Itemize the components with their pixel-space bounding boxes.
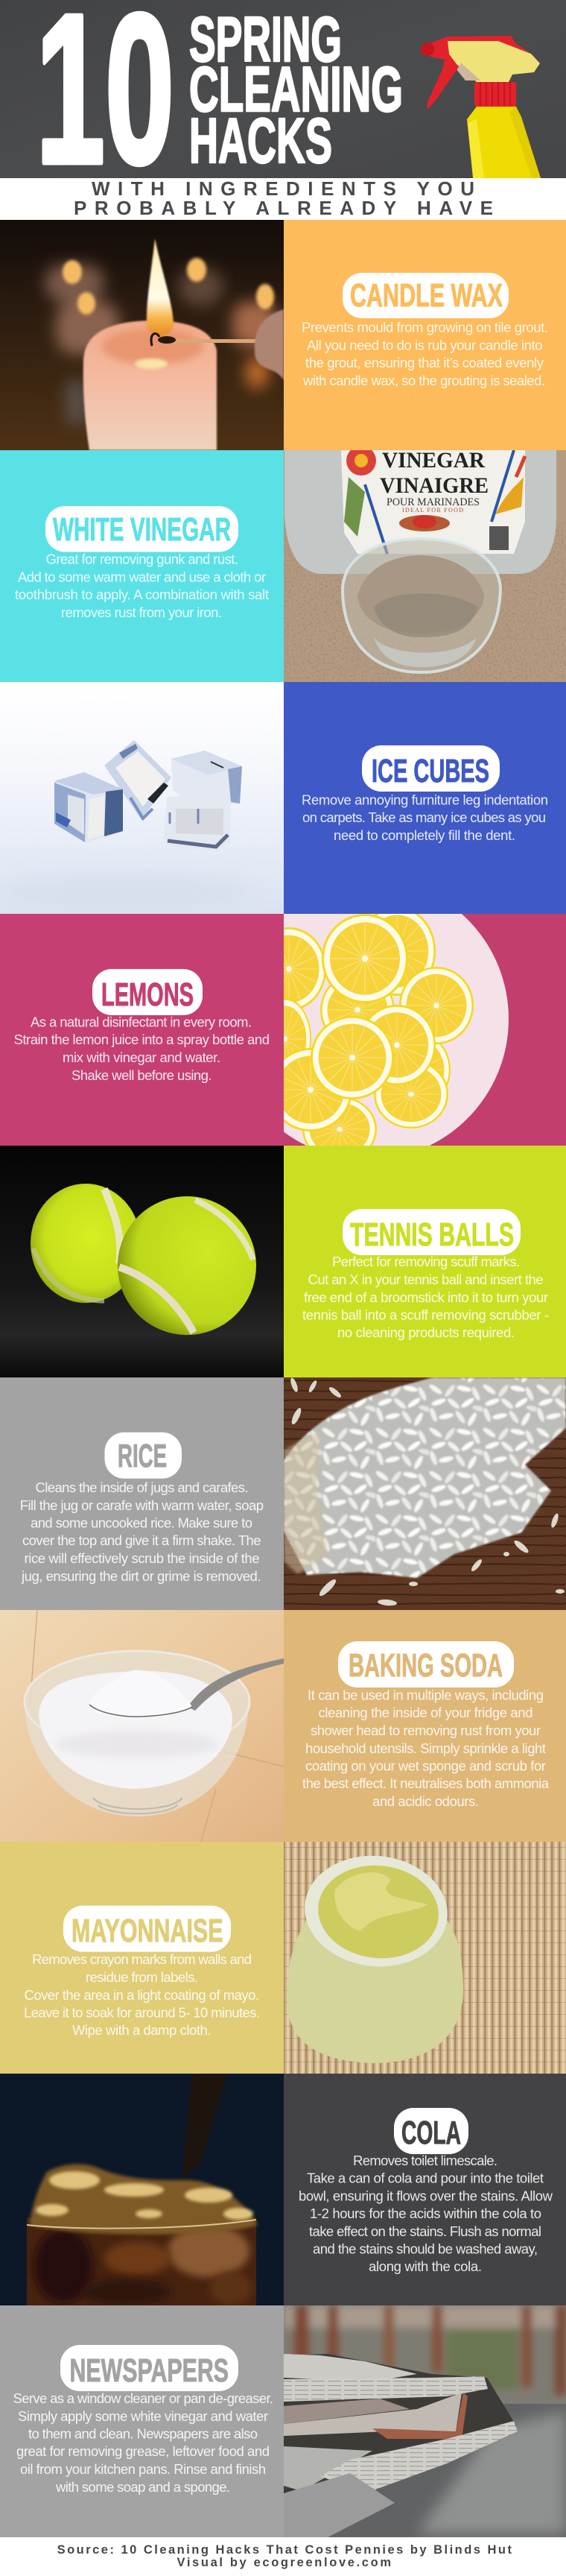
panel: mayonnaise bbox=[0, 1842, 284, 2074]
text: lemons description: mix with vinegar and water. bbox=[63, 1049, 220, 1065]
photo: mayonnaise jar on bamboo mat bbox=[284, 1842, 566, 2074]
text: white vinegar description: Great for removing gunk and rust. bbox=[46, 552, 238, 567]
jug label bbox=[341, 446, 525, 554]
text: rice description: rice will effectively scrub the inside of the bbox=[24, 1550, 259, 1566]
text: candle wax description: All you need to do is rub your candle into bbox=[307, 337, 542, 353]
panel: white vinegar bbox=[0, 450, 284, 682]
text: ice cubes description: Remove annoying furniture leg indentation bbox=[302, 792, 548, 807]
text: rice description: jug, ensuring the dirt or grime is removed. bbox=[21, 1568, 261, 1584]
text: candle wax description: with candle wax, so the grouting is sealed. bbox=[302, 373, 545, 388]
text: newspapers description: with some soap and a sponge. bbox=[55, 2479, 230, 2495]
text: candle wax description: the grout, ensuring that it’s coated evenly bbox=[305, 355, 544, 370]
subtitle line 2: PROBABLY ALREADY HAVE bbox=[74, 197, 493, 219]
photo: vinegar jug and glass bowl bbox=[284, 446, 566, 682]
text: candle wax description: Prevents mould from growing on tile grout. bbox=[302, 319, 548, 335]
candle body bbox=[83, 321, 217, 450]
label pill: rice: RICE bbox=[118, 1438, 167, 1474]
photo: candle bbox=[0, 220, 284, 450]
text: tennis balls description: Perfect for removing scuff marks. bbox=[332, 1254, 520, 1269]
panel: newspapers bbox=[0, 2305, 284, 2537]
wood grain bbox=[30, 1610, 284, 1842]
panel: ice cubes bbox=[284, 682, 566, 914]
text: rice description: cover the top and give it a firm shake. The bbox=[22, 1532, 261, 1548]
panel: candle wax bbox=[284, 220, 566, 450]
heading: Spring Cleaning Hacks: CLEANING bbox=[189, 54, 403, 125]
text: rice description bbox=[20, 1480, 264, 1584]
subtitle line 1: WITH INGREDIENTS YOU bbox=[92, 177, 474, 200]
text: tennis balls description bbox=[302, 1254, 549, 1340]
text: cola description: take effect on the stains. Flush as normal bbox=[309, 2223, 541, 2239]
text: tennis balls description: Cut an X in your tennis ball and insert the bbox=[308, 1272, 544, 1287]
photo: lemon slices on plate bbox=[284, 914, 566, 1146]
photo: ice cubes bbox=[0, 740, 284, 914]
text: newspapers description: to them and clean. Newspapers are also bbox=[28, 2425, 258, 2442]
text: rice description: Cleans the inside of jugs and carafes. bbox=[36, 1480, 249, 1495]
footer: source credits: Source: 10 Cleaning Hacks That Cost Pennies by Blinds Hut bbox=[57, 2543, 512, 2557]
text: baking soda description bbox=[302, 1688, 550, 1809]
text: baking soda description: coating on your wet sponge and scrub for bbox=[305, 1758, 546, 1774]
front tennis ball bbox=[118, 1196, 256, 1335]
newspapers bbox=[284, 2354, 518, 2537]
cola glass bbox=[27, 2217, 256, 2305]
text: cola description: bowl, ensuring it flows over the stains. Allow bbox=[299, 2188, 553, 2203]
label pill: rice bbox=[104, 1433, 182, 1479]
text: tennis balls description: tennis ball into a scuff removing scrubber - bbox=[302, 1307, 549, 1322]
cube left bbox=[54, 772, 123, 843]
jug label: POUR MARINADES bbox=[387, 496, 480, 508]
text: ice cubes description bbox=[302, 792, 548, 843]
heading: Spring Cleaning Hacks: HACKS bbox=[189, 106, 332, 177]
photo: tennis balls bbox=[0, 1146, 284, 1377]
label pill: lemons bbox=[92, 969, 203, 1015]
text: cola description: along with the cola. bbox=[369, 2258, 482, 2274]
heading: Spring Cleaning Hacks bbox=[189, 4, 403, 177]
photo: cola glass bbox=[0, 2074, 284, 2305]
subtitle band bbox=[0, 177, 566, 220]
jar body bbox=[287, 1916, 463, 2063]
footer: source credits bbox=[57, 2543, 512, 2569]
panel: tennis balls bbox=[284, 1146, 566, 1377]
text: mayonnaise description: Removes crayon marks from walls and bbox=[32, 1951, 252, 1967]
match and wick bbox=[151, 334, 256, 346]
text: baking soda description: the best effect. It neutralises both ammonia bbox=[302, 1775, 550, 1791]
fingers bbox=[255, 309, 284, 380]
ice and foam bbox=[27, 2165, 258, 2235]
label pill: newspapers: NEWSPAPERS bbox=[70, 2352, 229, 2389]
cola stream bbox=[182, 2074, 227, 2180]
header banner bbox=[0, 0, 566, 208]
glass bowl bbox=[343, 539, 500, 672]
jug label: IDEAL FOR FOOD bbox=[402, 507, 463, 514]
panel: lemons bbox=[0, 914, 284, 1146]
label pill: candle wax bbox=[343, 273, 509, 318]
panel: rice bbox=[0, 1377, 284, 1610]
text: white vinegar description bbox=[15, 552, 269, 620]
photo: baking soda bowl bbox=[0, 1610, 284, 1842]
mayonnaise surface bbox=[318, 1865, 439, 1959]
text: mayonnaise description bbox=[24, 1951, 260, 2038]
text: lemons description: Shake well before using. bbox=[71, 1067, 212, 1083]
text: newspapers description bbox=[13, 2390, 273, 2495]
label pill: tennis balls bbox=[343, 1209, 521, 1255]
label pill: mayonnaise bbox=[63, 1906, 231, 1952]
text: mayonnaise description: Leave it to soak for around 5- 10 minutes. bbox=[24, 2005, 260, 2020]
jar rim bbox=[305, 1856, 448, 1966]
text: white vinegar description: toothbrush to apply. A combination with salt bbox=[15, 587, 269, 602]
panel: baking soda bbox=[284, 1610, 566, 1842]
jug bbox=[284, 450, 556, 574]
label pill: candle wax: CANDLE WAX bbox=[350, 277, 503, 314]
scattered grains bbox=[289, 1377, 565, 1606]
label pill: ice cubes: ICE CUBES bbox=[372, 753, 489, 789]
text: lemons description: As a natural disinfectant in every room. bbox=[31, 1014, 252, 1030]
label pill: ice cubes bbox=[362, 745, 500, 792]
text: tennis balls description: no cleaning products required. bbox=[337, 1325, 515, 1340]
text: cola description: Take a can of cola and pour into the toilet bbox=[307, 2171, 544, 2186]
label pill: white vinegar bbox=[45, 506, 238, 552]
text: rice description: and some uncooked rice. Make sure to bbox=[31, 1515, 252, 1531]
label pill: baking soda bbox=[338, 1641, 514, 1688]
label pill: cola: COLA bbox=[401, 2115, 461, 2151]
footer: source credits: Visual by ecogreenlove.com bbox=[177, 2556, 391, 2569]
label pill: newspapers bbox=[60, 2345, 238, 2391]
photo: stack of newspapers bbox=[284, 2305, 566, 2537]
text: mayonnaise description: Cover the area in a light coating of mayo. bbox=[24, 1987, 259, 2003]
label pill: white vinegar: WHITE VINEGAR bbox=[53, 511, 231, 548]
glass bowl bbox=[25, 1651, 249, 1816]
panel: cola bbox=[284, 2074, 566, 2305]
lemon slices bbox=[284, 914, 474, 1146]
heading: Spring Cleaning Hacks: SPRING bbox=[189, 4, 342, 75]
text: white vinegar description: Add to some warm water and use a cloth or bbox=[18, 569, 266, 584]
cube back diamond bbox=[104, 740, 171, 820]
water drops bbox=[0, 871, 253, 910]
text: newspapers description: Serve as a window cleaner or pan de-greaser. bbox=[13, 2390, 273, 2406]
text: mayonnaise description: Wipe with a damp cloth. bbox=[72, 2022, 212, 2038]
mayonnaise swirl highlight bbox=[334, 1872, 428, 1931]
plate bbox=[284, 914, 509, 1146]
text: baking soda description: shower head to removing rust from your bbox=[311, 1723, 541, 1738]
rice pile bbox=[284, 1377, 566, 1606]
text: baking soda description: It can be used in multiple ways, including bbox=[308, 1688, 544, 1703]
table top bbox=[284, 2404, 566, 2537]
text: mayonnaise description: residue from labels. bbox=[86, 1969, 198, 1985]
text: tennis balls description: free end of a broomstick into it to turn your bbox=[304, 1289, 548, 1305]
text: candle wax description bbox=[302, 319, 548, 388]
text: cola description: 1-2 hours for the acids within the cola to bbox=[310, 2206, 541, 2221]
label pill: cola bbox=[394, 2108, 468, 2154]
cube front right bbox=[165, 796, 231, 849]
cube right back bbox=[171, 751, 242, 805]
blurred background tea lights bbox=[45, 258, 277, 425]
flame bbox=[147, 239, 174, 336]
text: ice cubes description: need to completely fill the dent. bbox=[334, 827, 515, 843]
baking soda powder bbox=[39, 1671, 232, 1789]
text: baking soda description: cleaning the inside of your fridge and bbox=[319, 1705, 533, 1720]
text: newspapers description: oil from your kitchen pans. Rinse and finish bbox=[20, 2461, 266, 2477]
text: baking soda description: household utensils. Simply sprinkle a light bbox=[305, 1740, 546, 1756]
text: white vinegar description: removes rust from your iron. bbox=[61, 604, 222, 620]
label pill: lemons: LEMONS bbox=[101, 976, 194, 1013]
text: cola description: and the stains should be washed away, bbox=[313, 2241, 538, 2257]
spoon bbox=[89, 1658, 284, 1719]
text: lemons description: Strain the lemon juice into a spray bottle and bbox=[13, 1032, 270, 1047]
blurred railing background bbox=[284, 2305, 566, 2395]
text: newspapers description: great for removing grease, leftover food and bbox=[16, 2443, 270, 2459]
text: lemons description bbox=[13, 1014, 270, 1083]
label pill: mayonnaise: MAYONNAISE bbox=[71, 1913, 223, 1949]
jug label: VINAIGRE bbox=[380, 473, 489, 498]
text: cola description bbox=[299, 2153, 553, 2274]
text: cola description: Removes toilet limescale. bbox=[353, 2153, 497, 2168]
back tennis ball bbox=[31, 1184, 141, 1303]
melted wax pool bbox=[102, 329, 203, 369]
text: baking soda description: and acidic odours. bbox=[372, 1793, 479, 1809]
jug label: VINEGAR bbox=[382, 448, 485, 473]
text: rice description: Fill the jug or carafe with warm water, soap bbox=[20, 1497, 264, 1513]
text: newspapers description: Simply apply some white vinegar and water bbox=[18, 2408, 268, 2424]
text: ice cubes description: on carpets. Take as many ice cubes as you bbox=[302, 809, 546, 825]
icon: spray bottle bbox=[421, 36, 541, 178]
photo: rice on wood bbox=[284, 1377, 566, 1610]
